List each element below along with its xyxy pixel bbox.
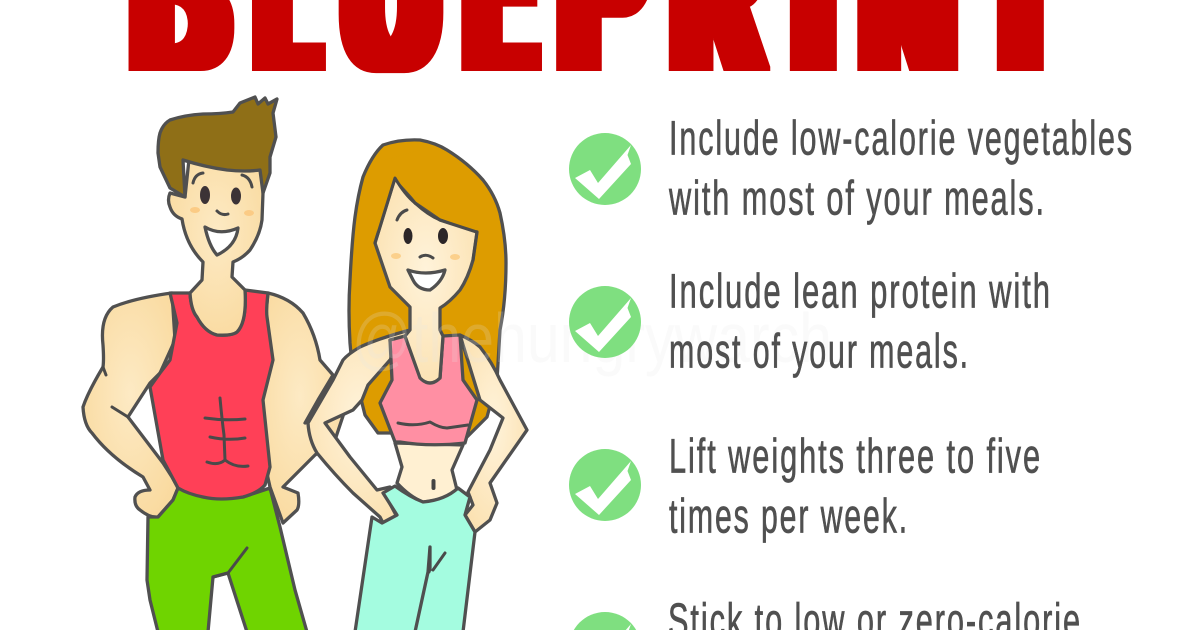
illustration: woman <box>308 140 527 630</box>
man mouth <box>205 227 238 255</box>
man arm fold <box>103 367 128 417</box>
check icon 2 <box>569 286 641 358</box>
illustration: man <box>83 97 345 630</box>
tip 3 text <box>669 430 1042 544</box>
man eyes <box>200 186 241 204</box>
man cheeks <box>190 207 254 216</box>
woman eyes <box>404 228 448 244</box>
man arm: right <box>255 293 345 523</box>
man tank top <box>150 290 273 499</box>
man neck and face <box>168 150 265 335</box>
tip 2 text: most of your meals. <box>669 326 970 378</box>
man arm: left <box>83 293 178 517</box>
man pants <box>147 488 307 630</box>
woman pants <box>355 486 475 630</box>
woman midriff <box>395 443 463 502</box>
man abs <box>205 398 248 466</box>
woman mouth <box>408 270 445 290</box>
woman cheeks <box>391 253 460 260</box>
man hair <box>158 97 277 197</box>
check icon 3 <box>569 449 641 521</box>
woman right arm <box>460 335 527 532</box>
title <box>128 0 1061 116</box>
check icon 1 <box>569 133 641 205</box>
check icon 4 <box>569 612 641 630</box>
tip 1 text <box>668 112 1134 226</box>
woman neck and chest <box>375 178 477 383</box>
woman left arm <box>308 330 410 523</box>
tip 3 text: times per week. <box>669 490 909 544</box>
woman pink top <box>380 335 477 445</box>
watermark: @thehungrywarch <box>352 299 832 377</box>
woman brow and nose <box>397 210 433 258</box>
woman navel <box>432 479 436 490</box>
tip 2 text <box>669 266 1052 378</box>
woman hair front <box>376 150 477 240</box>
man brows and nose <box>193 173 252 215</box>
woman hair <box>349 140 506 437</box>
